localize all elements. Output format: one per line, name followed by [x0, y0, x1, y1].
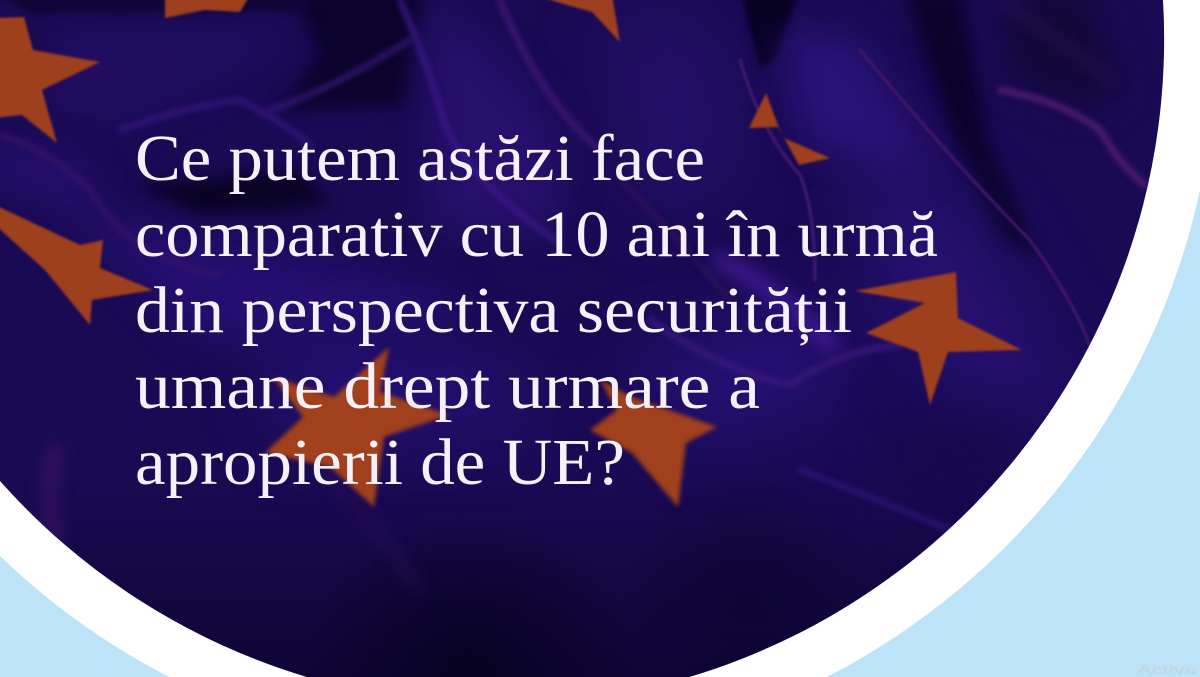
star: bottom right [590, 380, 717, 507]
EU flag stars, soft focus [265, 347, 717, 507]
EU flag stars [0, 0, 1022, 405]
star: middle left [0, 205, 153, 325]
line 4: umane drept urmare a [135, 350, 760, 423]
star: bottom centre [265, 347, 449, 507]
line 2: comparativ cu 10 ani în urmă [135, 198, 938, 271]
star: folded upper right [749, 93, 830, 165]
star: top edge middle [546, 0, 621, 42]
line 3: din perspectiva securității [135, 274, 852, 347]
star: top edge left [165, 0, 250, 18]
star: top left [0, 17, 100, 143]
star: right [855, 272, 1022, 405]
question heading [135, 122, 938, 499]
activation watermark: Activa [1137, 663, 1198, 677]
line 5: apropierii de UE? [135, 426, 625, 499]
line 1: Ce putem astăzi face [135, 122, 705, 195]
